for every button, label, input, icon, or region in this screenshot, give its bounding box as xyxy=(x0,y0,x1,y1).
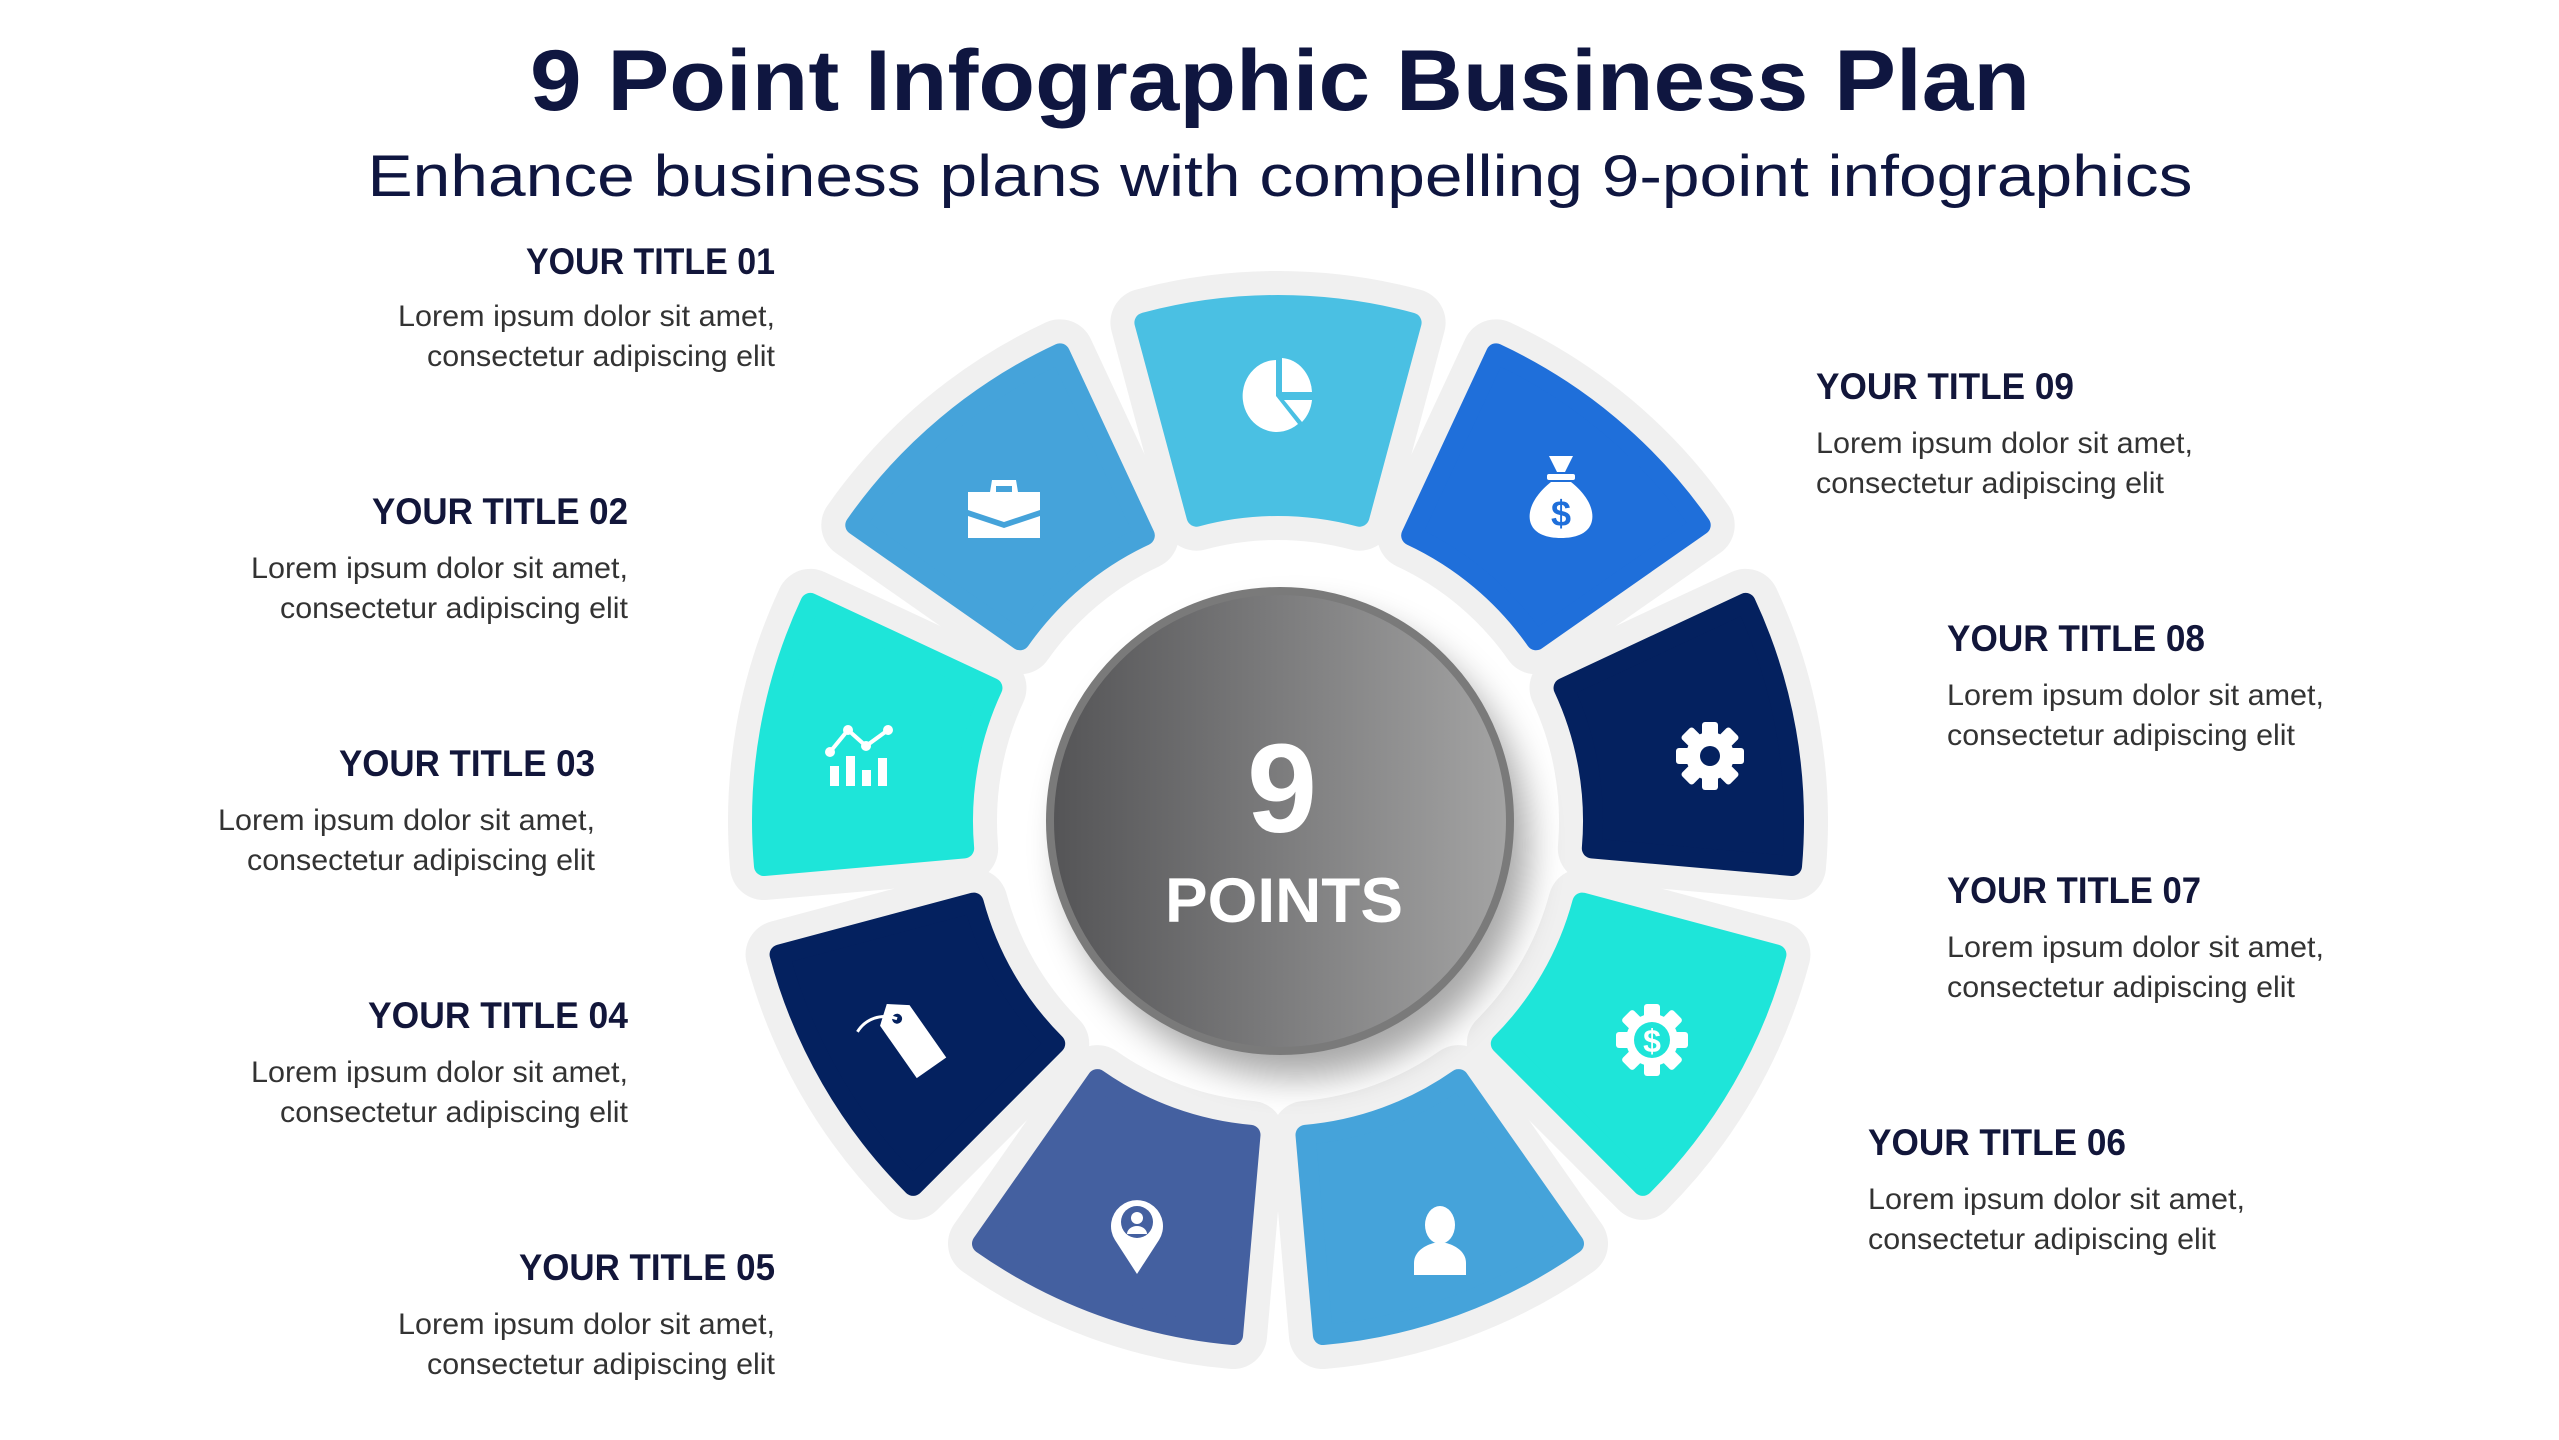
title: 9 Point Infographic Business Plan xyxy=(530,33,2030,129)
icon: price tag xyxy=(854,994,946,1091)
text block 05: YOUR TITLE 05 xyxy=(519,1247,775,1288)
text block 07: YOUR TITLE 07 xyxy=(1947,870,2201,911)
text block 02 xyxy=(251,491,629,625)
text block 02: consectetur adipiscing elit xyxy=(280,592,629,625)
icon: location pin xyxy=(1111,1200,1163,1274)
text block 03: Lorem ipsum dolor sit amet, xyxy=(218,804,595,837)
text block 08: Lorem ipsum dolor sit amet, xyxy=(1947,679,2324,712)
text block 06: consectetur adipiscing elit xyxy=(1868,1223,2217,1256)
subtitle: Enhance business plans with compelling 9-point infographics xyxy=(368,144,2192,209)
icon: briefcase xyxy=(968,480,1040,538)
icon: money bag xyxy=(1530,456,1592,538)
center circle: 9 xyxy=(1247,718,1317,859)
text block 09: YOUR TITLE 09 xyxy=(1816,366,2074,407)
text block 04: Lorem ipsum dolor sit amet, xyxy=(251,1056,628,1089)
text block 09: Lorem ipsum dolor sit amet, xyxy=(1816,427,2193,460)
center circle: POINTS xyxy=(1165,866,1403,936)
wedge ring xyxy=(747,305,1809,1352)
text block 06 xyxy=(1868,1122,2245,1256)
text block 02: Lorem ipsum dolor sit amet, xyxy=(251,552,628,585)
text block 01: consectetur adipiscing elit xyxy=(427,340,776,373)
text block 01: YOUR TITLE 01 xyxy=(526,241,775,282)
icon: dollar gear: $ xyxy=(1643,1023,1661,1059)
text block 07 xyxy=(1947,870,2324,1004)
text block 04: consectetur adipiscing elit xyxy=(280,1096,629,1129)
icon: money bag: $ xyxy=(1551,493,1571,534)
text block 07: Lorem ipsum dolor sit amet, xyxy=(1947,931,2324,964)
icon: pie chart xyxy=(1243,358,1312,432)
text block 05: Lorem ipsum dolor sit amet, xyxy=(398,1308,775,1341)
text block 08: YOUR TITLE 08 xyxy=(1947,618,2205,659)
text block 05: consectetur adipiscing elit xyxy=(427,1348,776,1381)
text block 03: consectetur adipiscing elit xyxy=(247,844,596,877)
icon: dollar gear xyxy=(1616,1004,1688,1076)
center circle xyxy=(1050,591,1528,1077)
text block 05 xyxy=(398,1247,776,1381)
text block 02: YOUR TITLE 02 xyxy=(372,491,628,532)
text block 08 xyxy=(1947,618,2324,752)
text block 06: Lorem ipsum dolor sit amet, xyxy=(1868,1183,2245,1216)
text block 01: Lorem ipsum dolor sit amet, xyxy=(398,300,775,333)
text block 03 xyxy=(218,743,596,877)
text block 09: consectetur adipiscing elit xyxy=(1816,467,2165,500)
text block 09 xyxy=(1816,366,2193,500)
icon: person xyxy=(1414,1206,1466,1275)
text block 04: YOUR TITLE 04 xyxy=(368,995,628,1036)
text block 08: consectetur adipiscing elit xyxy=(1947,719,2296,752)
text block 04 xyxy=(251,995,629,1129)
icon: gear xyxy=(1676,722,1744,790)
text block 07: consectetur adipiscing elit xyxy=(1947,971,2296,1004)
text block 01 xyxy=(398,241,776,373)
text block 03: YOUR TITLE 03 xyxy=(339,743,595,784)
text block 06: YOUR TITLE 06 xyxy=(1868,1122,2126,1163)
icon: chart xyxy=(825,725,893,786)
